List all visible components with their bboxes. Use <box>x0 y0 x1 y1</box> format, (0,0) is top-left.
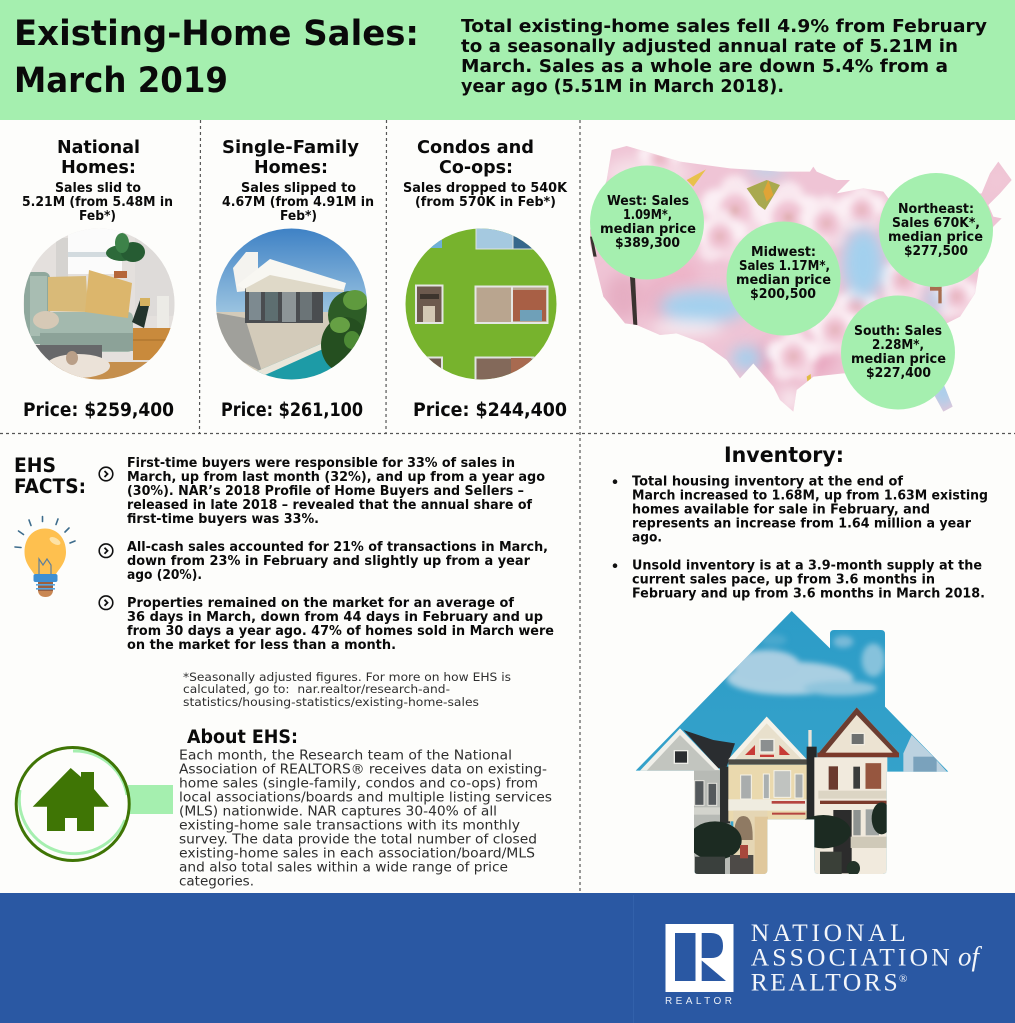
inventory bullet 2 <box>613 559 985 602</box>
about text: existing-home sales in each association/board/MLS <box>179 846 535 861</box>
photo: modern house with pool <box>216 228 367 380</box>
summary text: March. Sales as a whole are down 5.4% from a <box>461 57 948 77</box>
about text: Each month, the Research team of the National <box>179 748 512 763</box>
heading: condos and co-ops: Condos and <box>417 137 534 158</box>
sales text: national homes: 5.21M (from 5.48M in <box>22 195 173 210</box>
sales text: single-family homes: Sales slipped to <box>241 181 356 196</box>
summary text: to a seasonally adjusted annual rate of 5.21M in <box>461 37 958 57</box>
region: west: 1.09M*, <box>623 207 672 223</box>
map: USA filled with cherry blossoms <box>580 136 1015 417</box>
heading: national homes: Homes: <box>61 157 136 178</box>
house-shaped photo <box>633 608 950 876</box>
panel: inventory <box>613 443 988 876</box>
about text: existing-home sale transactions with its monthly <box>179 818 520 833</box>
heading: inventory: Inventory: <box>724 443 844 468</box>
footnote: calculated, go to: nar.realtor/research-and- <box>183 682 450 696</box>
price: single-family homes: Price: $261,100 <box>221 400 363 421</box>
logo: REALTOR mark <box>665 924 734 1007</box>
inventory bullet 1: Total housing inventory at the end of <box>632 475 903 490</box>
logo: REALTOR mark: REALTOR <box>665 996 732 1007</box>
icon: arrow bullet 2 <box>99 544 113 558</box>
icon: arrow bullet 1 <box>99 467 113 481</box>
icon: arrow bullet 3 <box>99 596 113 610</box>
title: March 2019 <box>14 61 228 101</box>
region: northeast: Northeast: <box>898 201 974 217</box>
fact: first-time buyers: released in late 2018 – revealed that the annual share of <box>127 498 532 513</box>
title <box>14 14 419 101</box>
fact: all-cash sales <box>127 540 548 583</box>
heading: about EHS: About EHS: <box>187 727 298 748</box>
heading: EHS facts <box>14 454 86 498</box>
header banner <box>0 0 1015 120</box>
region: northeast: Sales 670K*, <box>892 215 980 231</box>
region: south: South: Sales <box>854 323 942 339</box>
fact: all-cash sales: ago (20%). <box>127 568 202 583</box>
fact: days on market: on the market for less than a month. <box>127 638 396 653</box>
logo: organisation name: NATIONAL <box>751 918 906 947</box>
panel: regional map <box>580 136 1015 417</box>
sales text: condos and co-ops <box>403 181 568 210</box>
region: midwest <box>726 222 840 336</box>
footnote: *Seasonally adjusted figures. For more on how EHS is <box>183 670 511 684</box>
region: south: 2.28M*, <box>872 337 924 353</box>
region: south: median price <box>851 351 946 367</box>
price: national homes: Price: $259,400 <box>23 400 174 421</box>
fact: first-time buyers: March, up from last month (32%), and up from a year ago <box>127 470 545 485</box>
fact: days on market: Properties remained on the market for an average of <box>127 596 514 611</box>
logo: organisation name: ® <box>899 973 907 985</box>
inventory bullet 2: Unsold inventory is at a 3.9-month supply at the <box>632 559 982 574</box>
inventory bullet 1: homes available for sale in February, and <box>632 503 930 518</box>
summary text: year ago (5.51M in March 2018). <box>461 77 784 97</box>
panel: condos and co-ops <box>400 137 568 421</box>
logo: organisation name: REALTORS <box>751 968 898 997</box>
about text: and also total sales within a wide range of price <box>179 860 508 875</box>
panel: national homes <box>20 137 180 421</box>
about text <box>179 748 552 889</box>
sales text: single-family homes <box>222 181 374 224</box>
sales text: single-family homes: Feb*) <box>280 209 317 224</box>
heading: EHS facts: EHS <box>14 454 56 477</box>
icon: house in circle <box>16 747 173 861</box>
heading: single-family homes: Single-Family <box>222 137 359 158</box>
fact: days on market: 36 days in March, down from 44 days in February and up <box>127 610 543 625</box>
inventory bullet 1: March increased to 1.68M, up from 1.63M existing <box>632 489 988 504</box>
far right house <box>903 735 947 772</box>
logo: organisation name: ASSOCIATION <box>751 943 950 972</box>
photo: living room <box>24 228 174 380</box>
footnote <box>183 670 511 709</box>
footnote: statistics/housing-statistics/existing-home-sales <box>183 695 479 709</box>
summary text: Total existing-home sales fell 4.9% from February <box>461 17 988 37</box>
sales text: national homes: Feb*) <box>79 209 116 224</box>
region: midwest: $200,500 <box>750 286 816 302</box>
panel: single-family homes <box>212 137 374 421</box>
about text: Association of REALTORS® receives data on existing- <box>179 762 547 777</box>
region: south: $227,400 <box>866 365 931 381</box>
region: west <box>590 166 704 280</box>
left grey house <box>641 728 720 771</box>
photo: green apartment wall <box>406 228 556 380</box>
sales text: national homes <box>22 181 173 224</box>
region: midwest: Sales 1.17M*, <box>739 258 830 274</box>
heading: EHS facts: FACTS: <box>14 475 86 498</box>
fact: days on market <box>127 596 554 653</box>
panel: about EHS <box>16 727 552 889</box>
fact: first-time buyers: (30%). NAR’s 2018 Profile of Home Buyers and Sellers – <box>127 484 524 499</box>
price: condos and co-ops: Price: $244,400 <box>413 400 567 421</box>
title: Existing-Home Sales: <box>14 14 419 54</box>
sales text: single-family homes: 4.67M (from 4.91M in <box>222 195 374 210</box>
heading: single-family homes <box>222 137 359 178</box>
trees <box>694 821 742 858</box>
icon: light bulb <box>15 516 75 597</box>
footer band <box>0 893 1015 1023</box>
about text: local associations/boards and multiple listing services <box>179 790 552 805</box>
panel: EHS facts <box>14 454 554 709</box>
region: midwest: Midwest: <box>751 244 816 260</box>
region: northeast: median price <box>888 229 983 245</box>
inventory bullet 1: ago. <box>632 531 662 546</box>
fact: first-time buyers: First-time buyers were responsible for 33% of sales in <box>127 456 515 471</box>
inventory bullet 1: represents an increase from 1.64 million a year <box>632 517 972 532</box>
about text: home sales (single-family, condos and co-ops) from <box>179 776 538 791</box>
region: west: West: Sales <box>607 193 689 209</box>
heading: national homes <box>57 137 140 178</box>
right house <box>808 730 812 750</box>
logo: organisation name: of <box>958 942 982 972</box>
sales text: condos and co-ops: Sales dropped to 540K <box>403 181 568 196</box>
heading: condos and co-ops <box>417 137 534 178</box>
sales text: national homes: Sales slid to <box>55 181 141 196</box>
centre cream house <box>728 717 807 759</box>
fact: first-time buyers <box>127 456 545 527</box>
inventory bullet 1 <box>613 475 988 546</box>
about text: categories. <box>179 874 254 889</box>
region: west: median price <box>600 221 696 237</box>
region: midwest: median price <box>736 272 831 288</box>
heading: national homes: National <box>57 137 140 158</box>
sales text: condos and co-ops: (from 570K in Feb*) <box>415 195 556 210</box>
about text: (MLS) nationwide. NAR captures 30-40% of all <box>179 804 497 819</box>
summary text <box>461 17 988 97</box>
region: west: $389,300 <box>615 235 680 251</box>
about text: survey. The data provide the total number of closed <box>179 832 537 847</box>
fact: all-cash sales: down from 23% in February and slightly up from a year <box>127 554 531 569</box>
region: northeast <box>879 173 993 287</box>
inventory bullet 2: current sales pace, up from 3.6 months in <box>632 573 935 588</box>
heading: condos and co-ops: Co-ops: <box>439 157 513 178</box>
inventory bullet 2: February and up from 3.6 months in March 2018. <box>632 587 985 602</box>
fact: days on market: from 30 days a year ago. 47% of homes sold in March were <box>127 624 554 639</box>
fact: first-time buyers: first-time buyers was 33%. <box>127 512 319 527</box>
logo: organisation name <box>751 918 982 997</box>
region: northeast: $277,500 <box>904 243 968 259</box>
fact: all-cash sales: All-cash sales accounted for 21% of transactions in March, <box>127 540 548 555</box>
region: south <box>841 296 955 410</box>
heading: single-family homes: Homes: <box>254 157 328 178</box>
